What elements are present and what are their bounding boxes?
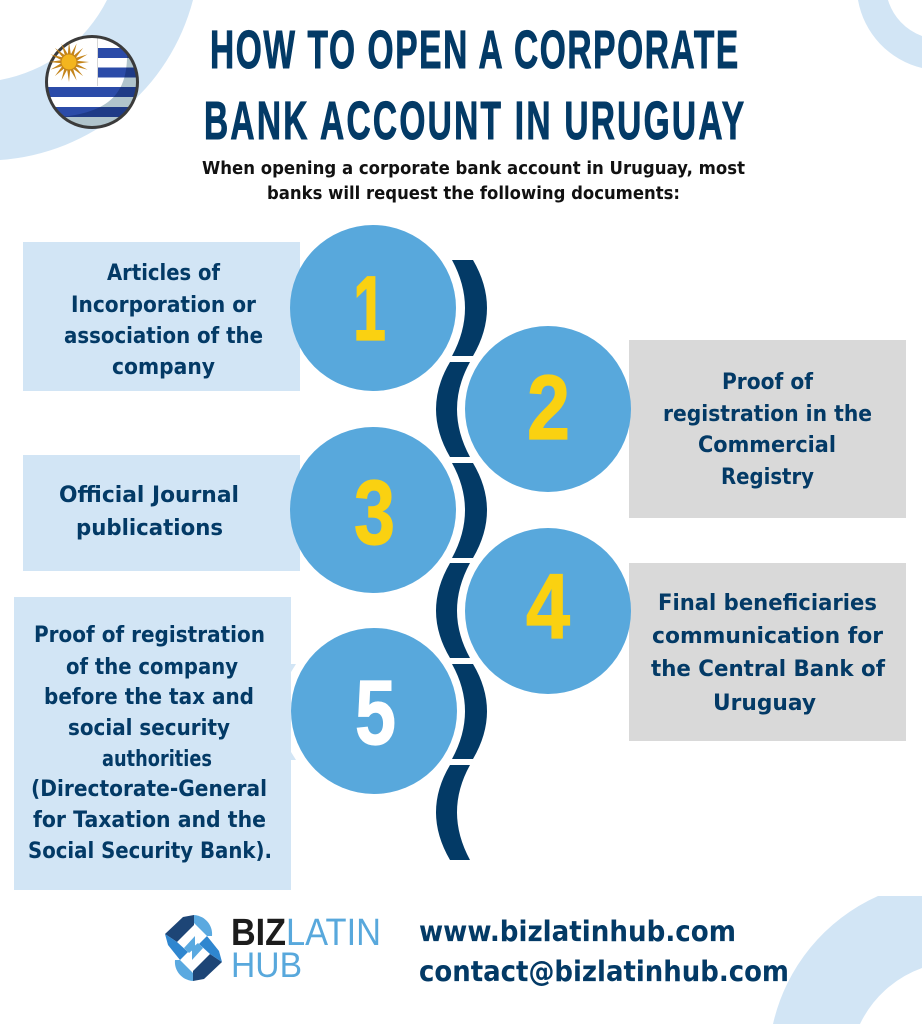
background arc: bottom right <box>773 896 922 1024</box>
panel: step 4 text <box>629 563 906 741</box>
logo wordmark: BIZ <box>231 912 286 954</box>
background arc: top left <box>0 0 193 160</box>
logo wordmark <box>231 912 381 985</box>
step 2 circle: 2 <box>527 357 570 459</box>
panel: step 1 text: association of the <box>64 323 263 349</box>
panel: step 3 text: publications <box>76 515 223 541</box>
panel: step 5 text: (Directorate-General <box>31 776 267 802</box>
step 3 circle <box>290 427 456 593</box>
icon: Biz Latin Hub logo mark <box>165 915 222 981</box>
panel: step 2 text <box>629 340 906 518</box>
step 1 circle <box>290 225 456 391</box>
step 5 circle: 5 <box>355 662 396 764</box>
panel: step 4 text: Final beneficiaries <box>658 590 877 616</box>
panel: step 2 text: Registry <box>721 464 814 490</box>
contact details <box>419 915 789 988</box>
panel: step 2 text: registration in the <box>663 401 872 427</box>
panel: step 5 text: authorities <box>102 746 212 772</box>
panel: step 5 text: social security <box>68 715 230 741</box>
logo wordmark: HUB <box>231 946 302 985</box>
panel: step 2 text: Proof of <box>722 369 813 395</box>
panel: step 1 text: Incorporation or <box>71 292 257 318</box>
panel: step 5 text <box>14 597 296 890</box>
contact details: contact@bizlatinhub.com <box>419 955 789 988</box>
panel: step 5 text: Social Security Bank). <box>28 838 272 864</box>
panel: step 5 text: for Taxation and the <box>33 807 266 833</box>
panel: step 1 text: Articles of <box>107 260 220 286</box>
panel: step 4 text: the Central Bank of <box>651 656 885 682</box>
step 1 circle: 1 <box>353 258 386 360</box>
background arc: top right <box>858 0 922 68</box>
panel: step 4 text: Uruguay <box>713 690 816 716</box>
subtitle: When opening a corporate bank account in Uruguay, most <box>202 158 745 179</box>
connector: navy wave <box>436 260 487 860</box>
step 4 circle: 4 <box>526 556 570 658</box>
step 2 circle <box>465 326 631 492</box>
panel: step 5 text: Proof of registration <box>34 622 265 648</box>
panel: step 1 text: company <box>112 354 215 380</box>
contact details: www.bizlatinhub.com <box>419 915 736 948</box>
logo wordmark: LATIN <box>286 912 381 954</box>
icon: Uruguay flag <box>44 36 140 135</box>
step 4 circle <box>465 528 631 694</box>
subtitle <box>202 158 745 204</box>
panel: step 3 text: Official Journal <box>59 482 239 508</box>
panel: step 2 text: Commercial <box>698 432 836 458</box>
panel: step 5 text: of the company <box>66 654 238 680</box>
panel: step 4 text: communication for <box>652 623 884 649</box>
panel: step 3 text <box>23 455 300 571</box>
title: BANK ACCOUNT IN URUGUAY <box>204 90 744 151</box>
title: HOW TO OPEN A CORPORATE <box>210 19 738 80</box>
step 3 circle: 3 <box>354 462 395 564</box>
panel: step 1 text <box>23 242 300 391</box>
title <box>204 19 744 151</box>
subtitle: banks will request the following documents: <box>267 183 680 204</box>
panel: step 5 text: before the tax and <box>44 684 254 710</box>
step 5 circle <box>291 628 457 794</box>
